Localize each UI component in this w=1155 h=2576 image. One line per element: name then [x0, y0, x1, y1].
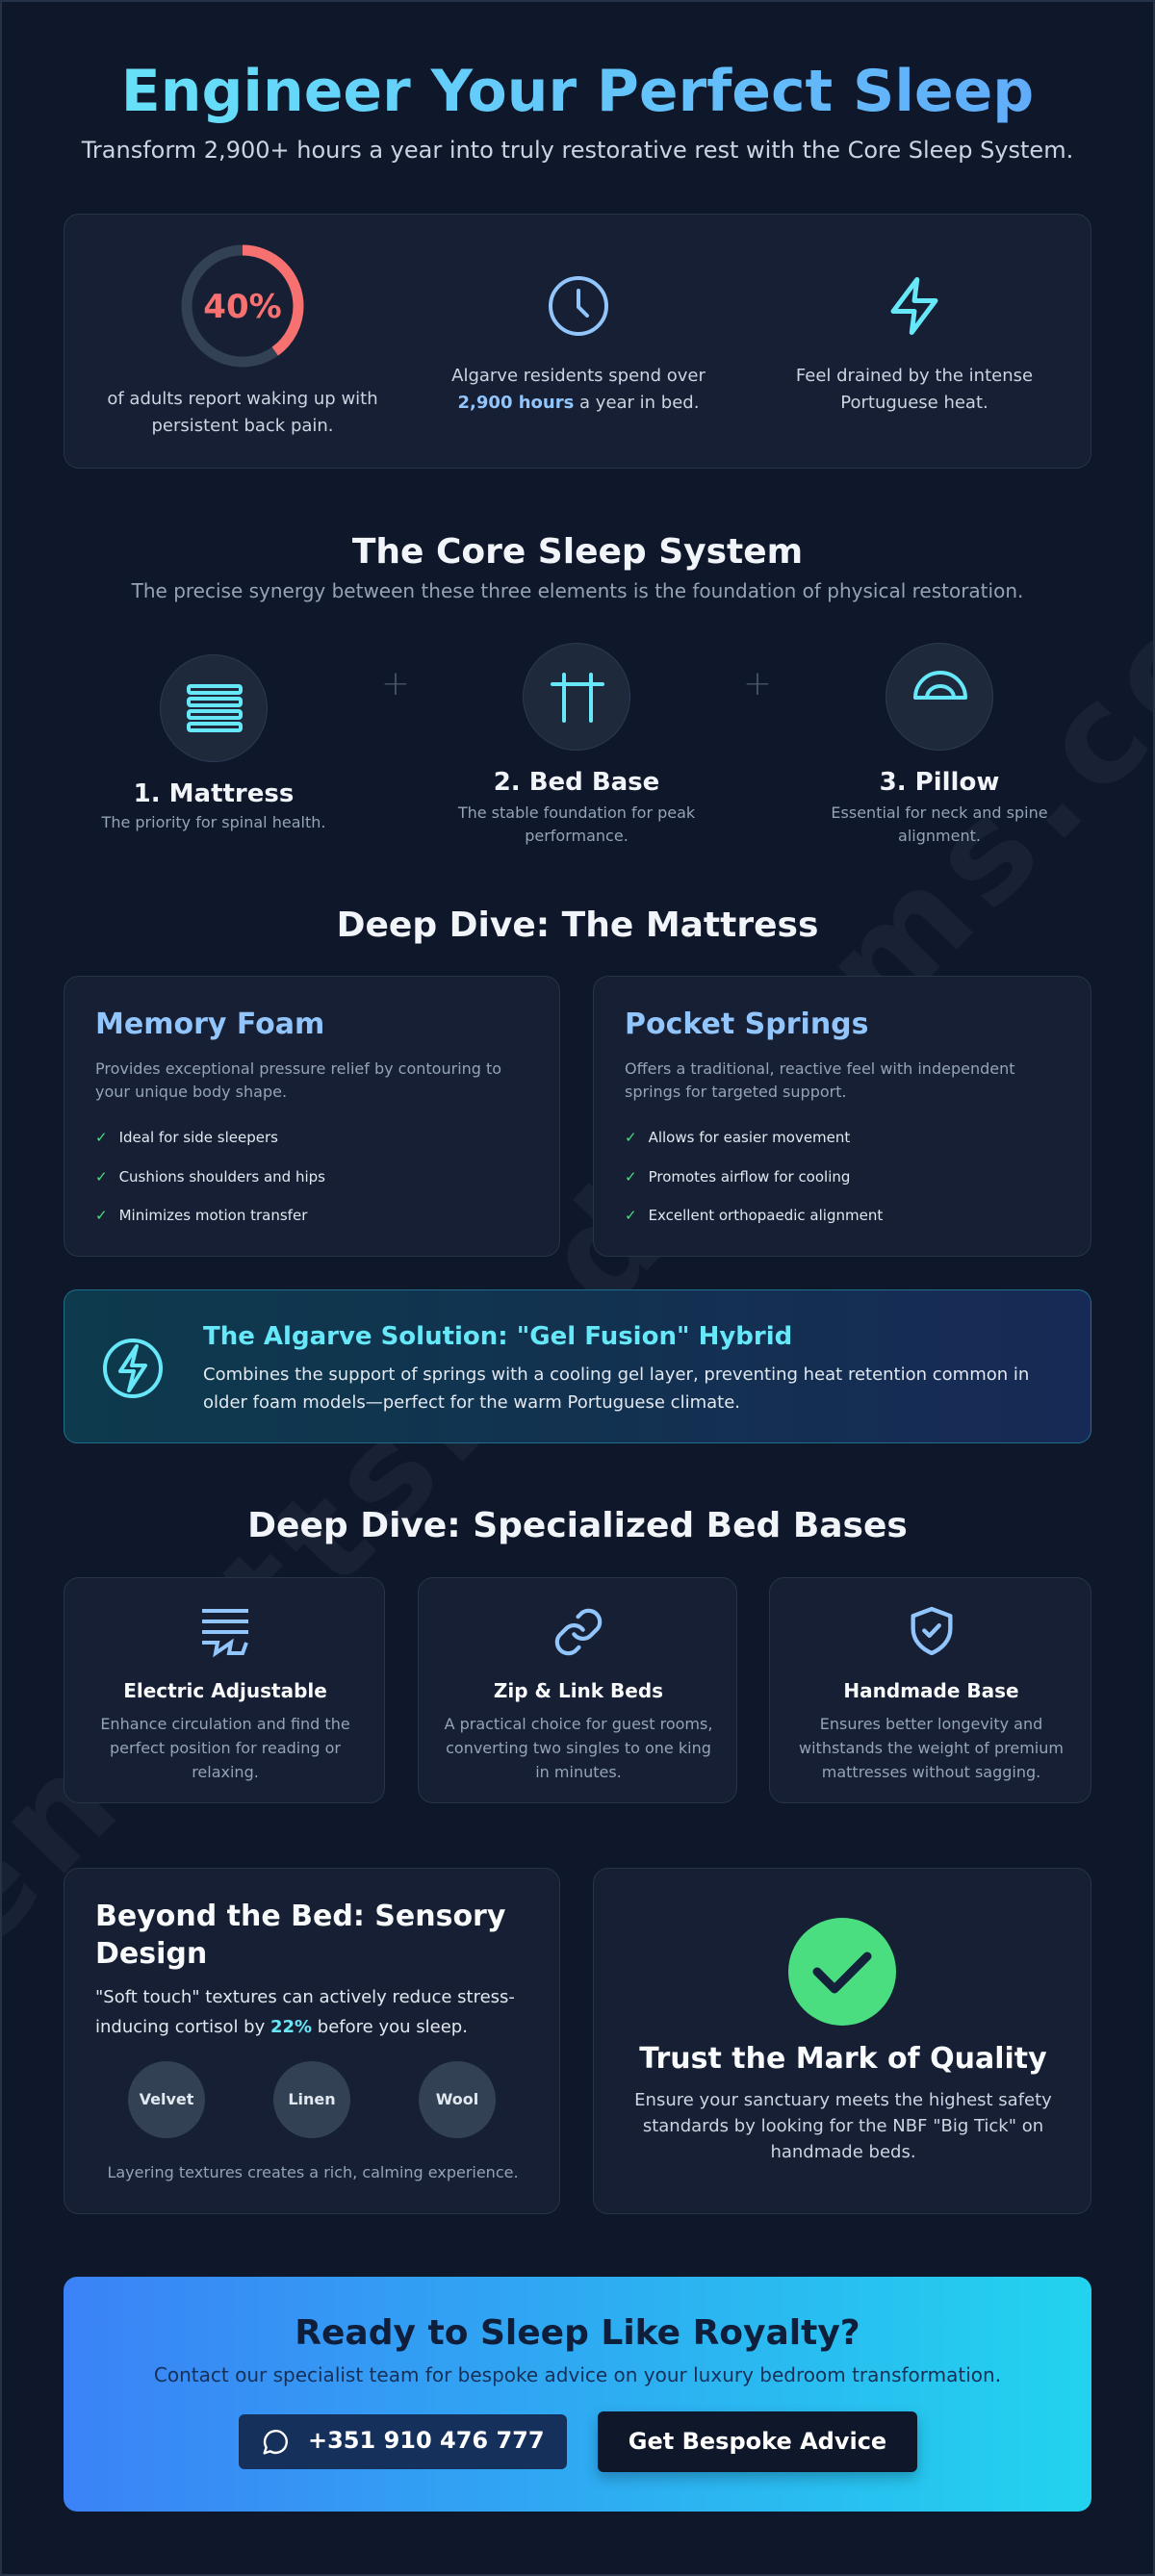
callout: gel fusion: Combines the support of springs with a cooling gel layer, preventing heat retention common in older foam models—perfect for the warm Portuguese climate.: [203, 1365, 1029, 1413]
plus: +: [743, 664, 772, 703]
icon: shield: [911, 1607, 953, 1655]
panel: CTA: Ready to Sleep Like Royalty?: [295, 2313, 860, 2353]
element: bed base: The stable foundation for peak: [458, 803, 695, 822]
panel: sensory design: Beyond the Bed: Sensory Design: [95, 1900, 505, 1971]
plus: +: [381, 664, 410, 703]
panel: memory foam: ✓ Minimizes motion transfer: [95, 1207, 307, 1224]
panel: quality mark: [593, 1868, 1091, 2214]
stat: hours: [451, 276, 706, 413]
element: pillow: Essential for neck and spine: [831, 803, 1048, 822]
panel: memory foam: Memory Foam: [95, 1007, 324, 1041]
stat: 40% ring: 40%: [203, 288, 282, 326]
stat: heat: [796, 277, 1033, 413]
panel: electric adjustable: Electric Adjustable: [123, 1679, 327, 1702]
panel: stats: [64, 214, 1091, 469]
stat: 40% ring: [107, 244, 378, 436]
panel: quality mark: Trust the Mark of Quality: [639, 2042, 1047, 2076]
text: core subtitle: The precise synergy between these three elements is the foundation of physical restoration.: [132, 579, 1023, 602]
panel: memory foam: [64, 976, 560, 1257]
panel: pocket springs: Pocket Springs: [625, 1007, 869, 1041]
heading: core sleep system: The Core Sleep System: [352, 532, 803, 572]
panel: memory foam: ✓ Ideal for side sleepers: [95, 1129, 278, 1146]
panel: memory foam: Provides exceptional pressure relief by contouring to your unique body shape.: [95, 1059, 501, 1101]
stat: heat: Feel drained by the intense: [796, 366, 1033, 386]
icon: gel bolt: [103, 1339, 163, 1398]
panel: pocket springs: [593, 976, 1091, 1257]
panel: pocket springs: ✓ Excellent orthopaedic alignment: [625, 1207, 883, 1224]
element: bed base: [458, 643, 695, 845]
panel: handmade base: Ensures better longevity and withstands the weight of premium mattresses without sagging.: [799, 1715, 1064, 1781]
icon: bed base: [523, 643, 630, 751]
texture chips: Velvet: [140, 2090, 193, 2108]
stat: 40% ring: of adults report waking up with: [107, 389, 378, 409]
callout: gel fusion: [64, 1289, 1091, 1443]
panel: CTA: [64, 2277, 1091, 2512]
stat: hours: 2,900 hours a year in bed.: [458, 393, 699, 413]
heading: mattress deep dive: Deep Dive: The Mattress: [337, 905, 818, 945]
element: pillow: 3. Pillow: [880, 768, 999, 797]
icon: big tick: [788, 1918, 896, 2026]
heading: bed bases: Deep Dive: Specialized Bed Bases: [247, 1506, 908, 1545]
element: pillow: alignment.: [898, 827, 981, 845]
element: pillow: [831, 643, 1048, 845]
element: mattress: The priority for spinal health.: [102, 813, 325, 831]
panel: memory foam: ✓ Cushions shoulders and hips: [95, 1168, 325, 1186]
panel: CTA: Contact our specialist team for bespoke advice on your luxury bedroom transformation.: [154, 2363, 1001, 2386]
panel: electric adjustable: Enhance circulation and find the perfect position for reading or relaxing.: [100, 1715, 350, 1781]
icon: link: [554, 1609, 603, 1655]
panel: zip & link: [418, 1577, 737, 1803]
button: advice: Get Bespoke Advice: [629, 2428, 886, 2455]
icon: pillow: [886, 643, 993, 751]
icon: mattress: [160, 654, 268, 762]
panel: electric adjustable: [64, 1577, 385, 1803]
panel: zip & link: A practical choice for guest rooms, converting two singles to one king in minutes.: [445, 1715, 712, 1781]
stat: 40% ring: persistent back pain.: [151, 416, 334, 436]
icon: adjustable: [202, 1609, 248, 1657]
panel: quality mark: Ensure your sanctuary meets the highest safety standards by looking for the NBF "Big Tick" on handmade beds.: [634, 2090, 1052, 2162]
texture chips: Linen: [288, 2090, 336, 2108]
panel: sensory design: "Soft touch" textures can actively reduce stress-inducing cortisol by 22% before you sleep.: [95, 1987, 515, 2037]
panel: pocket springs: ✓ Allows for easier movement: [625, 1129, 850, 1146]
panel: sensory design: Layering textures creates a rich, calming experience.: [107, 2163, 519, 2181]
stat: hours: Algarve residents spend over: [451, 366, 706, 386]
panel: handmade base: Handmade Base: [843, 1679, 1019, 1702]
element: bed base: performance.: [525, 827, 629, 845]
texture chips: Wool: [436, 2090, 478, 2108]
button: phone: [239, 2414, 567, 2469]
panel: zip & link: Zip & Link Beds: [494, 1679, 663, 1702]
panel: pocket springs: Offers a traditional, reactive feel with independent springs for targeted support.: [625, 1059, 1014, 1101]
callout: gel fusion: The Algarve Solution: "Gel Fusion" Hybrid: [203, 1322, 792, 1351]
button: advice: [598, 2411, 917, 2472]
stat: heat: Portuguese heat.: [840, 393, 988, 413]
panel: sensory design: [64, 1868, 560, 2214]
panel: pocket springs: ✓ Promotes airflow for cooling: [625, 1168, 850, 1186]
element: bed base: 2. Bed Base: [494, 768, 659, 797]
panel: handmade base: [769, 1577, 1091, 1803]
button: phone: +351 910 476 777: [308, 2427, 545, 2454]
element: mattress: [101, 654, 325, 831]
title: Engineer Your Perfect Sleep: [121, 58, 1034, 125]
texture chips: [128, 2061, 496, 2138]
element: mattress: 1. Mattress: [134, 779, 294, 808]
subtitle: Transform 2,900+ hours a year into truly restorative rest with the Core Sleep System.: [82, 137, 1073, 164]
